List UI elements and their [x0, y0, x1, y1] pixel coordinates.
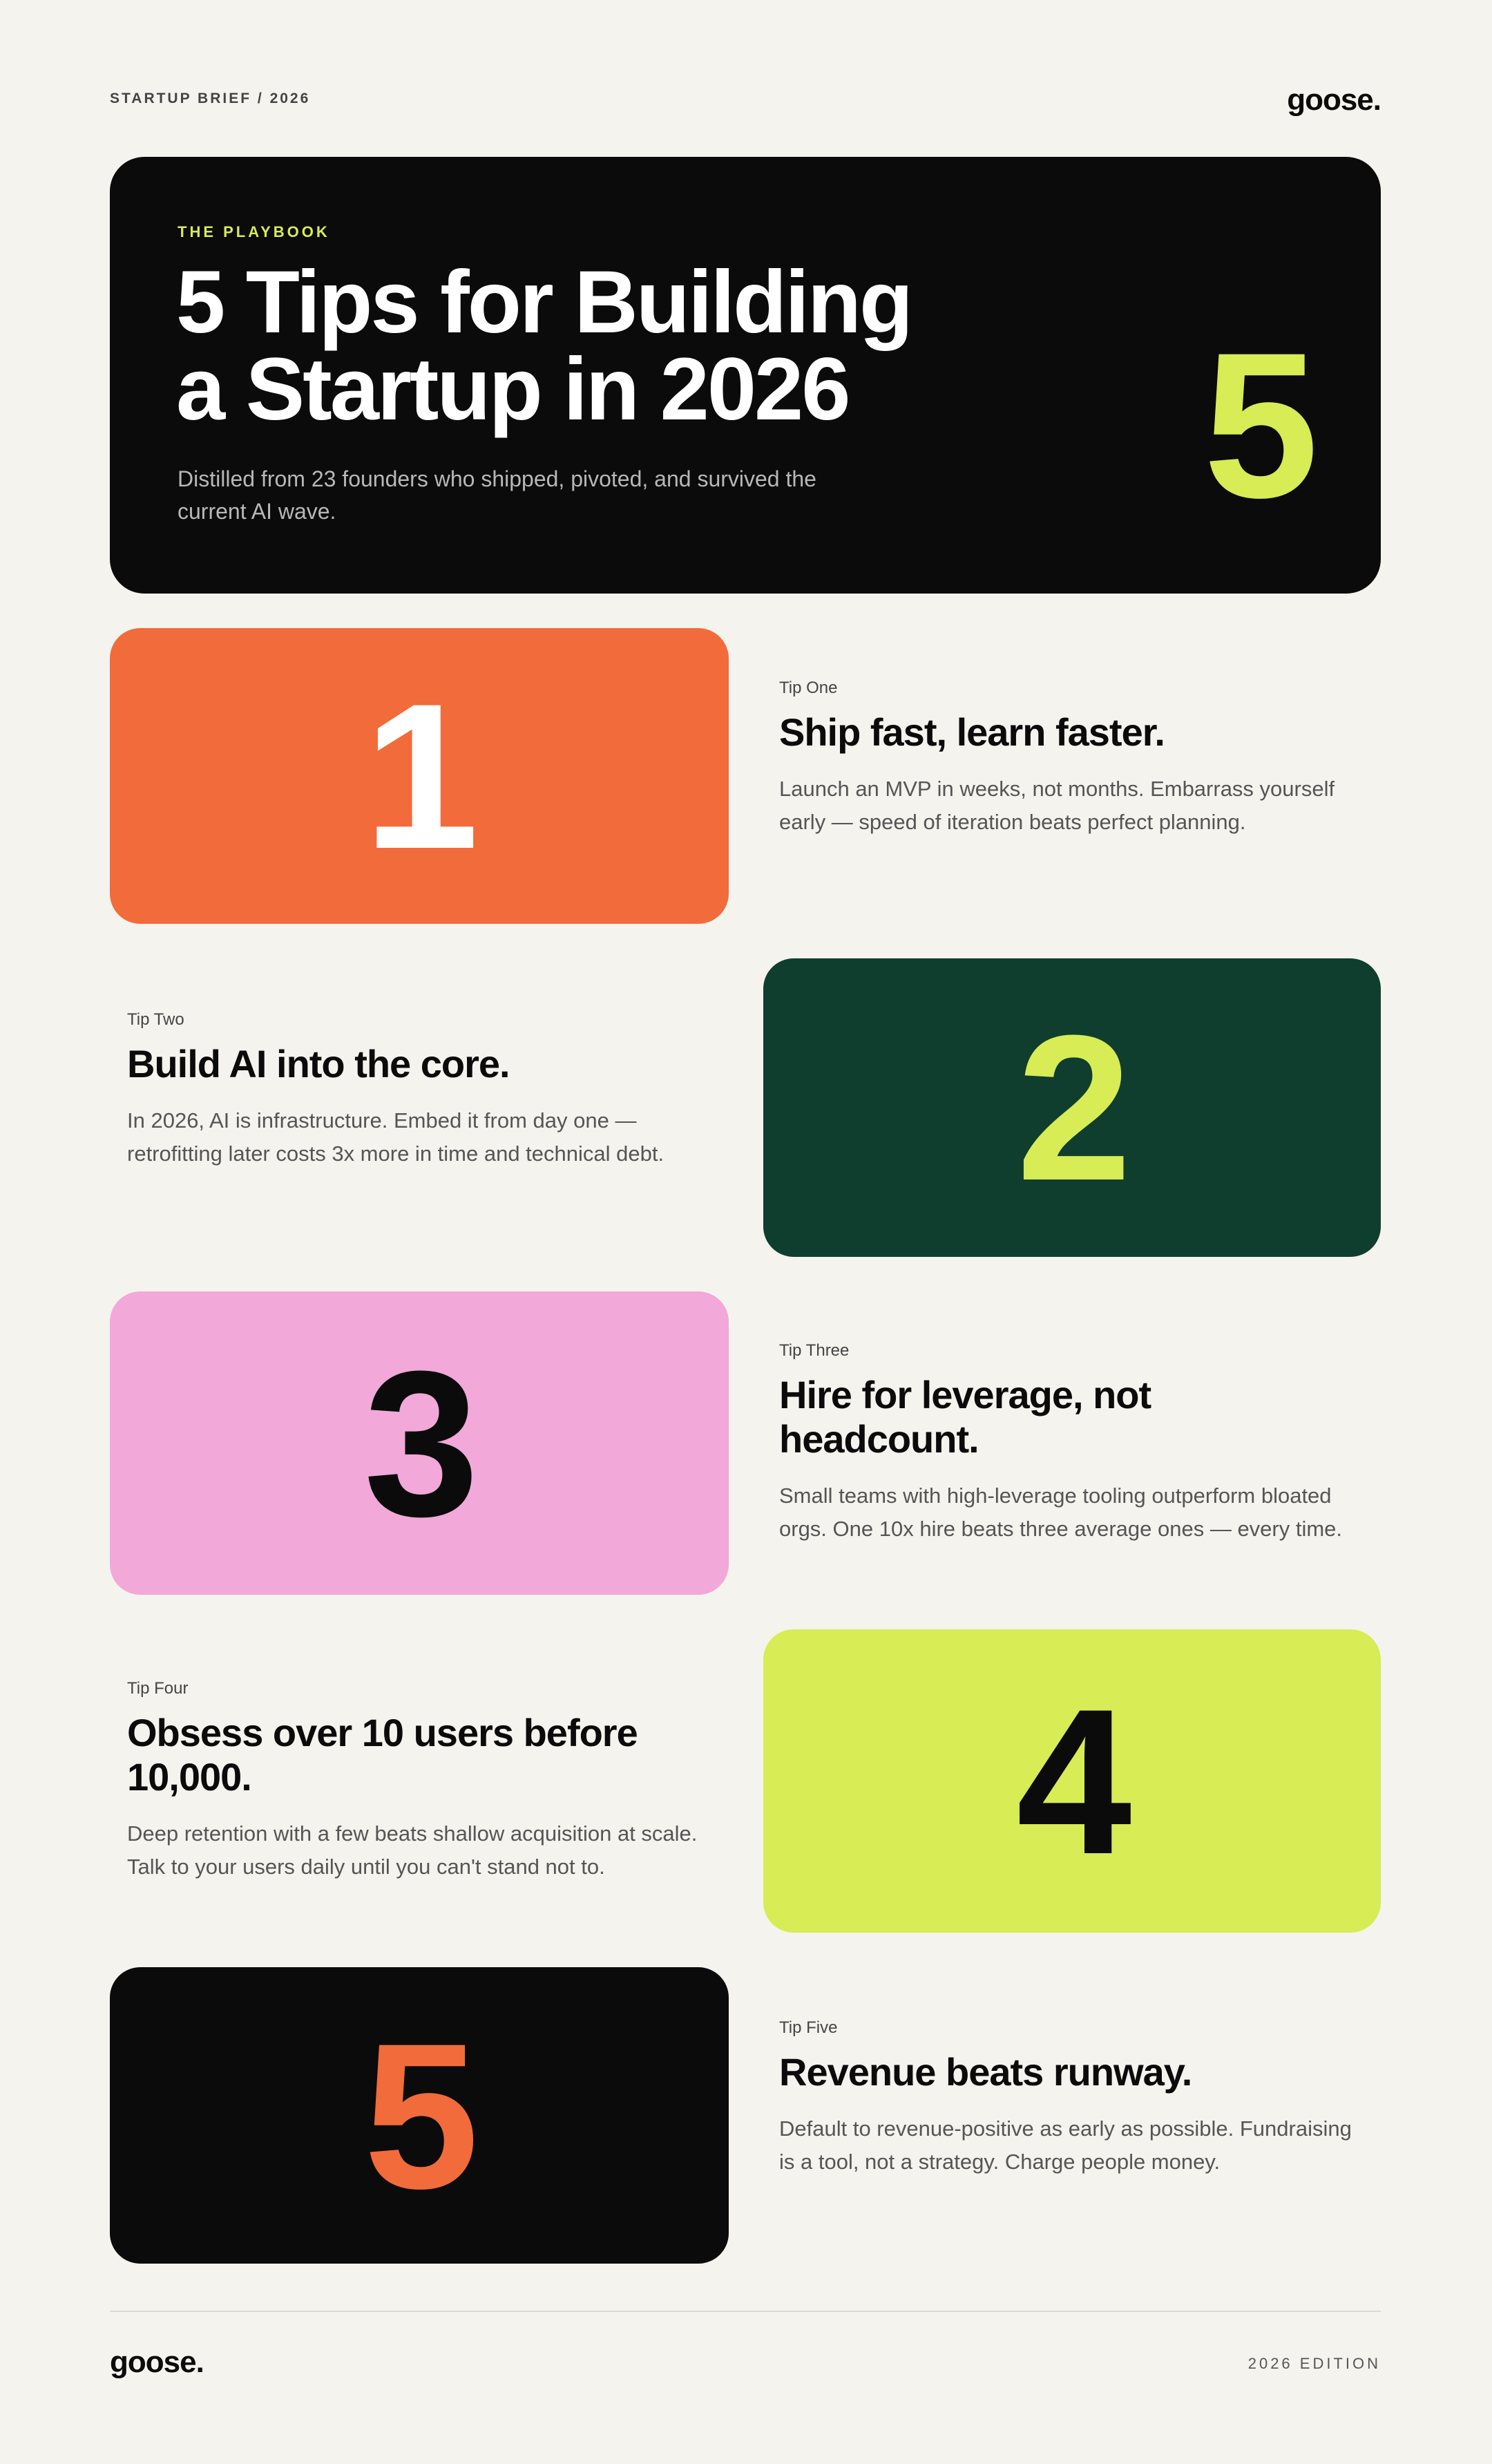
hero subtitle: Distilled from 23 founders who shipped, pivoted, and survived the current AI wave.	[178, 466, 816, 524]
hero panel	[110, 157, 1381, 594]
tip 3 text: Hire for leverage, not	[779, 1372, 1151, 1416]
tip 3 text: Tip Three	[779, 1340, 849, 1360]
tip 4 text: Obsess over 10 users before	[127, 1711, 638, 1754]
tip 4 card: 4	[1017, 1665, 1127, 1897]
tip 4 text: Deep retention with a few beats shallow acquisition at scale. Talk to your users daily until you can't stand not to.	[127, 1821, 697, 1878]
tip 2 text	[127, 1010, 664, 1166]
tip 2 card: 2	[1017, 992, 1127, 1224]
tip 5 text	[779, 2018, 1352, 2174]
tip 4 text	[127, 1679, 697, 1878]
hero title: a Startup in 2026	[176, 340, 848, 439]
tip 5 text: Tip Five	[779, 2018, 837, 2037]
tip 3 text	[779, 1340, 1342, 1541]
header label: STARTUP BRIEF / 2026	[110, 91, 310, 106]
tip 2 text: Build AI into the core.	[127, 1042, 510, 1086]
tip 3 text: headcount.	[779, 1416, 979, 1461]
tip 4 card	[763, 1629, 1381, 1933]
tip 5 card	[110, 1967, 729, 2264]
tip 5 text: Revenue beats runway.	[779, 2049, 1192, 2094]
tip 3 card	[110, 1291, 729, 1595]
tip 1 text	[779, 679, 1335, 834]
hero title: 5 Tips for Building	[176, 253, 911, 352]
tip 1 card: 1	[364, 660, 475, 892]
tip 2 text: Tip Two	[127, 1010, 184, 1029]
tip 3 card: 3	[364, 1327, 475, 1559]
tip 4 text: Tip Four	[127, 1679, 188, 1697]
tip 1 text: Tip One	[779, 679, 837, 697]
tip 2 card	[763, 958, 1381, 1257]
tip 4 text: 10,000.	[127, 1755, 251, 1798]
tip 5 card: 5	[364, 2000, 475, 2232]
big 5: 5	[1203, 309, 1319, 541]
footer edition: 2026 EDITION	[1248, 2355, 1381, 2372]
tip 1 card	[110, 628, 729, 924]
header logo: goose.	[1287, 83, 1381, 117]
tip 5 text: Default to revenue-positive as early as possible. Fundraising is a tool, not a strategy. Charge people money.	[779, 2116, 1352, 2174]
eyebrow: THE PLAYBOOK	[178, 223, 330, 240]
tip 3 text: Small teams with high-leverage tooling outperform bloated orgs. One 10x hire beats three average ones — every time.	[779, 1483, 1342, 1541]
hero title	[176, 253, 911, 439]
tip 1 text: Launch an MVP in weeks, not months. Embarrass yourself early — speed of iteration beats perfect planning.	[779, 777, 1335, 834]
footer logo: goose.	[110, 2345, 204, 2379]
tip 2 text: In 2026, AI is infrastructure. Embed it from day one — retrofitting later costs 3x more in time and technical debt.	[127, 1108, 664, 1166]
tip 1 text: Ship fast, learn faster.	[779, 710, 1165, 754]
